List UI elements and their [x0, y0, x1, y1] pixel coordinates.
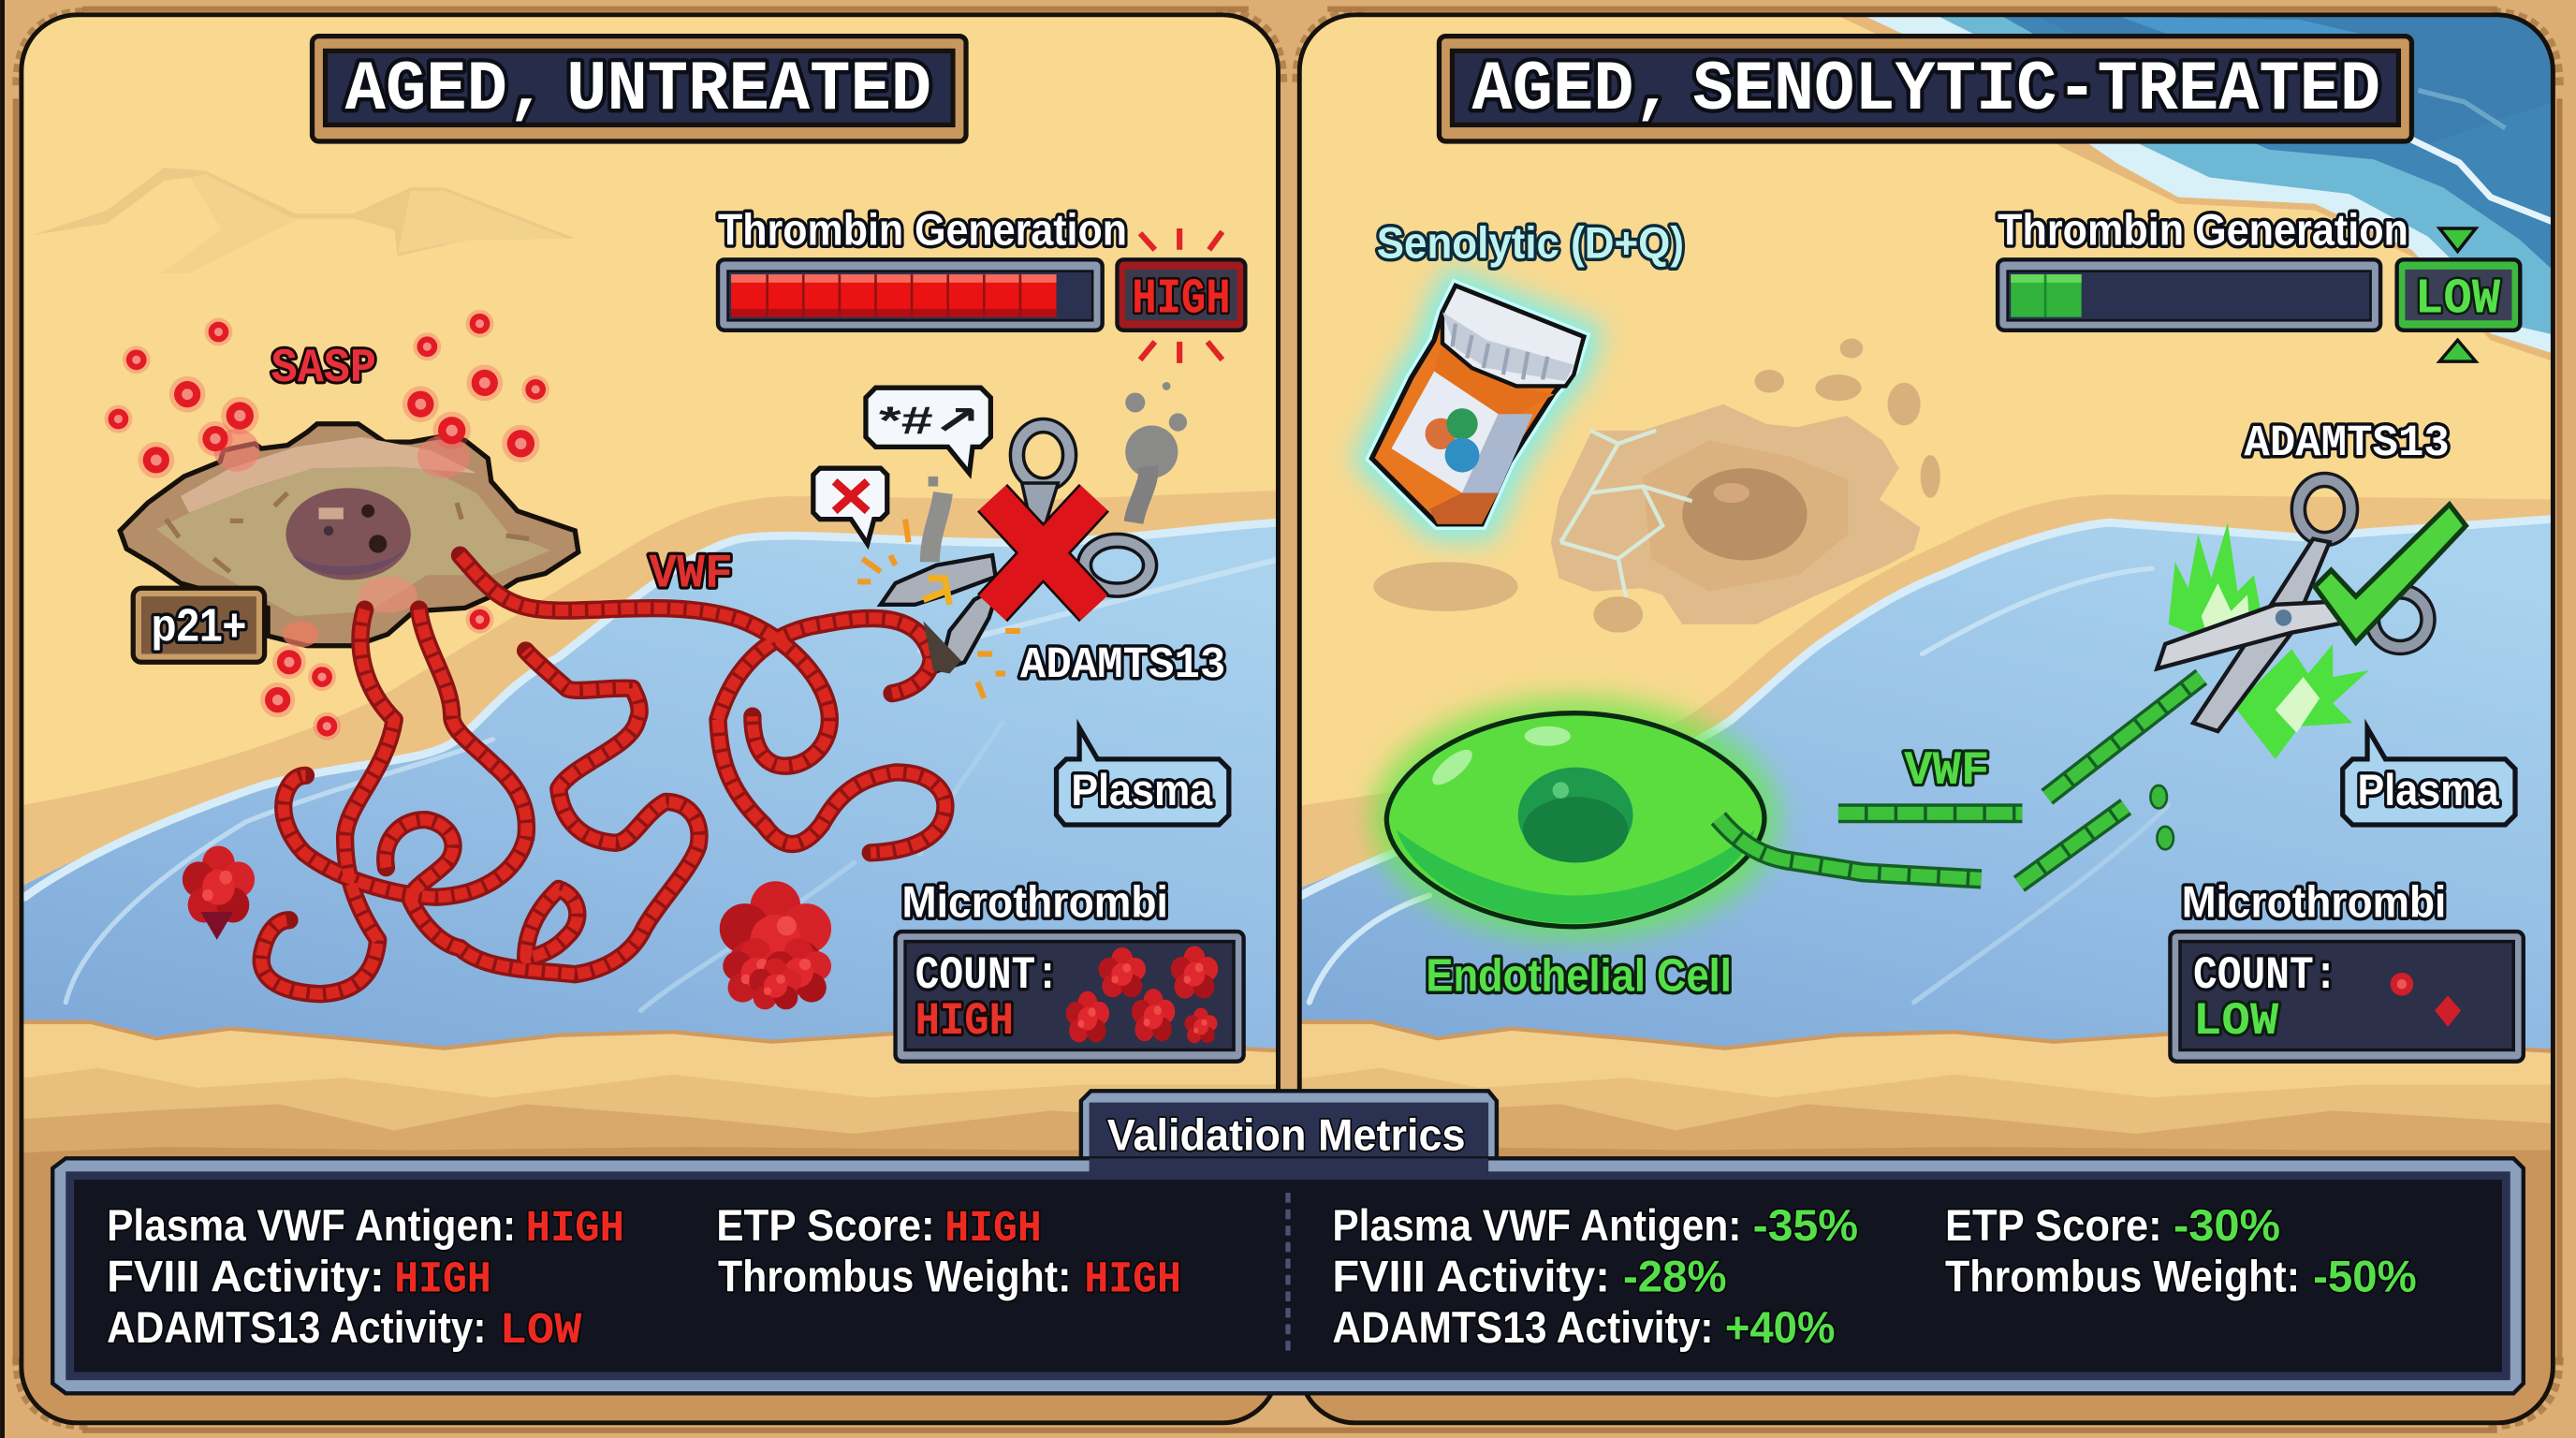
body frame — [52, 1158, 2524, 1393]
metrics: untreated: HIGH — [526, 1205, 624, 1255]
label: ADAMTS13: ADAMTS13 — [2244, 419, 2450, 469]
label — [1392, 372, 1499, 493]
icon: down triangle — [2439, 228, 2476, 252]
badge: LOW: LOW — [2415, 271, 2501, 327]
clot small — [183, 845, 255, 940]
background: lower sand bands — [0, 1022, 1298, 1438]
badge: HIGH: HIGH — [1132, 271, 1231, 327]
background: plasma water — [23, 526, 1276, 1049]
label: SASP: SASP — [271, 343, 376, 396]
foam lines — [24, 522, 1281, 1010]
count box: high: COUNT: — [915, 949, 1060, 1002]
label: plasma — [1057, 727, 1229, 825]
speech bubble: X — [813, 468, 887, 544]
thrombin gauge: high — [718, 259, 1103, 330]
speech bubble: symbols — [866, 388, 990, 473]
label: senolytic: Senolytic (D+Q) — [1377, 219, 1684, 269]
alert rays — [1140, 228, 1222, 363]
metrics: treated: ADAMTS13 Activity: — [1332, 1303, 1714, 1353]
senescent cell — [120, 424, 578, 647]
background: sand — [1299, 15, 2553, 1423]
title: aged, senolytic-treated: AGED, SENOLYTIC-TREATED — [1472, 50, 2380, 130]
badge: p21+ — [133, 588, 265, 662]
debris — [1593, 339, 1940, 633]
SASP particles — [105, 310, 549, 741]
metrics: untreated: Plasma VWF Antigen: — [107, 1201, 516, 1251]
count box: low: COUNT: — [2193, 949, 2337, 1002]
metrics: untreated: HIGH — [394, 1255, 491, 1305]
metrics: untreated: HIGH — [1084, 1255, 1181, 1305]
healthy VWF fragments — [1719, 677, 2202, 884]
metrics: treated — [1332, 1201, 2417, 1353]
badge: HIGH — [1117, 259, 1245, 330]
metrics: untreated: Thrombus Weight: — [718, 1252, 1071, 1301]
metrics: treated: -30% — [2174, 1201, 2280, 1251]
metrics: untreated: ETP Score: — [716, 1201, 935, 1251]
count box: high — [896, 932, 1244, 1062]
label: endothelial cell: Endothelial Cell — [1426, 950, 1732, 1001]
metrics: treated: -35% — [1753, 1201, 1858, 1251]
nucleus — [285, 488, 411, 580]
panel: aged, senolytic-treated — [1281, 0, 2563, 1438]
panel: aged, untreated — [0, 15, 1298, 1438]
tab — [1081, 1091, 1497, 1171]
label: plasma — [2343, 727, 2515, 825]
thrombin gauge: low — [1998, 259, 2380, 330]
metrics: untreated: FVIII Activity: — [107, 1252, 385, 1301]
tab: Validation Metrics — [1107, 1111, 1466, 1161]
label: plasma: Plasma — [2358, 766, 2499, 815]
count box: low — [2170, 932, 2524, 1062]
metrics: untreated: HIGH — [944, 1205, 1042, 1255]
blades — [881, 555, 996, 605]
background: plasma water — [1281, 516, 2563, 1084]
metrics: treated: ETP Score: — [1945, 1201, 2162, 1251]
metrics: treated: FVIII Activity: — [1332, 1252, 1610, 1301]
bottle shadow — [1373, 562, 1518, 611]
icon: up triangle — [2439, 340, 2476, 361]
count box: low: LOW — [2193, 995, 2279, 1048]
background: upper-right sea — [1822, 0, 2563, 365]
sparks — [857, 520, 1020, 698]
label: microthrombi: Microthrombi — [2182, 877, 2446, 927]
cap — [1442, 286, 1584, 386]
background: sand — [23, 17, 1276, 805]
clot large — [720, 881, 831, 1009]
metrics: untreated — [107, 1201, 1181, 1357]
label: microthrombi: Microthrombi — [902, 877, 1168, 927]
icon: broken ADAMTS13 scissors — [857, 382, 1187, 698]
background: wet sand — [24, 491, 1276, 885]
background: lower sand bands — [1281, 1022, 2563, 1438]
title: aged, untreated: AGED, UNTREATED — [345, 50, 931, 130]
badge: p21+: p21+ — [152, 600, 246, 651]
background: wet sand — [1281, 494, 2563, 1084]
badge: LOW — [2397, 259, 2520, 330]
label: VWF: VWF — [1904, 745, 1989, 799]
nucleus — [1518, 768, 1633, 862]
icon: senolytic pill bottle — [1372, 286, 1584, 524]
VWF multimers, tangled — [261, 555, 945, 994]
metrics: treated: Thrombus Weight: — [1945, 1252, 2300, 1301]
metrics: untreated: LOW — [500, 1307, 582, 1357]
icon: red X — [992, 498, 1094, 608]
handles — [1017, 426, 1150, 590]
metrics: treated: -28% — [1623, 1252, 1727, 1301]
background: dunes — [33, 168, 575, 272]
metrics: treated: +40% — [1725, 1303, 1835, 1353]
smoke — [929, 382, 1187, 562]
metrics: untreated: ADAMTS13 Activity: — [107, 1303, 487, 1353]
endothelial cell — [1372, 697, 1779, 940]
label: thrombin generation: Thrombin Generation — [1998, 205, 2408, 255]
metrics: treated: -50% — [2313, 1252, 2417, 1301]
icon: working ADAMTS13 scissors — [2157, 479, 2466, 759]
foam lines — [1301, 520, 2550, 1003]
dying senescent cell — [1551, 339, 1940, 633]
green bursts — [2169, 522, 2369, 759]
icon: green check — [2315, 505, 2466, 642]
label: VWF: VWF — [649, 549, 733, 602]
pills — [1426, 418, 1456, 449]
count box: high: HIGH — [915, 995, 1014, 1048]
panel: validation metrics — [52, 1091, 2524, 1393]
label: plasma: Plasma — [1071, 766, 1213, 815]
label: thrombin generation: Thrombin Generation — [718, 205, 1127, 255]
metrics: treated: Plasma VWF Antigen: — [1332, 1201, 1741, 1251]
speech bubble: symbols: *#↗ — [879, 398, 981, 442]
label: ADAMTS13: ADAMTS13 — [1020, 641, 1225, 691]
